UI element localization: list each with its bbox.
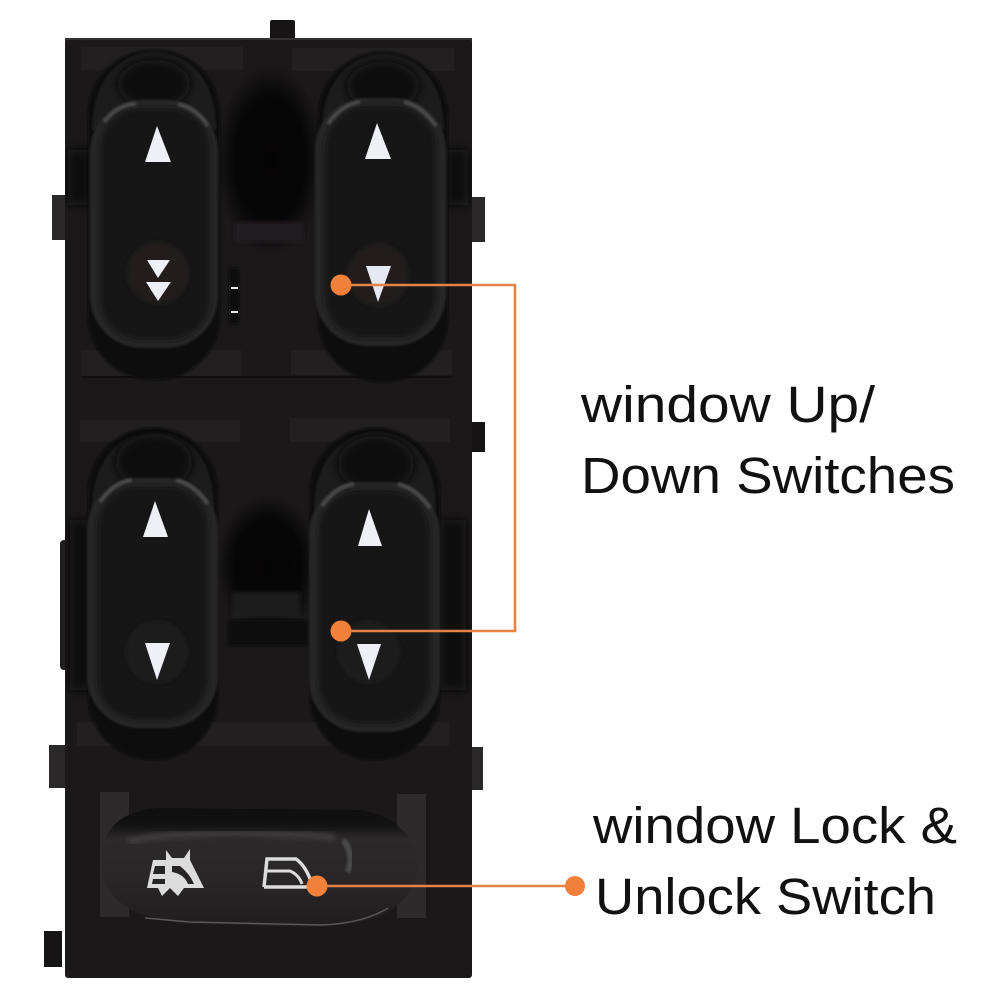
button: top left: [88, 50, 220, 380]
up arrow: [145, 126, 171, 162]
button: top right: [315, 52, 448, 382]
double down arrow: [146, 260, 171, 301]
label: window lock and unlock switch: window Lock &: [592, 797, 957, 854]
recessed bars: [77, 47, 454, 746]
label: window lock and unlock switch: [592, 797, 957, 925]
icon: window: [264, 859, 312, 887]
side shadows: [68, 150, 468, 690]
up arrow: [358, 509, 382, 546]
down arrow: [366, 266, 391, 302]
button: bottom left: [87, 428, 218, 760]
connector: window lock switch: [306, 876, 585, 896]
down arrow: [145, 643, 170, 680]
connector: window up/down switches: [330, 274, 515, 642]
button: bottom right: [309, 428, 440, 760]
label: window up/down switches: [580, 376, 955, 504]
label: window lock and unlock switch: Unlock Switch: [595, 868, 936, 925]
centre dark channels: [216, 65, 324, 646]
label: window up/down switches: Down Switches: [581, 447, 955, 504]
down arrow: [357, 644, 381, 680]
small contact window: [229, 268, 239, 324]
icon: rear window lock: [147, 849, 204, 896]
label: window up/down switches: window Up/: [580, 376, 876, 433]
up arrow: [143, 501, 168, 537]
window lock rocker switch: [100, 792, 426, 927]
switch panel body: [44, 20, 485, 978]
up arrow: [365, 123, 391, 159]
